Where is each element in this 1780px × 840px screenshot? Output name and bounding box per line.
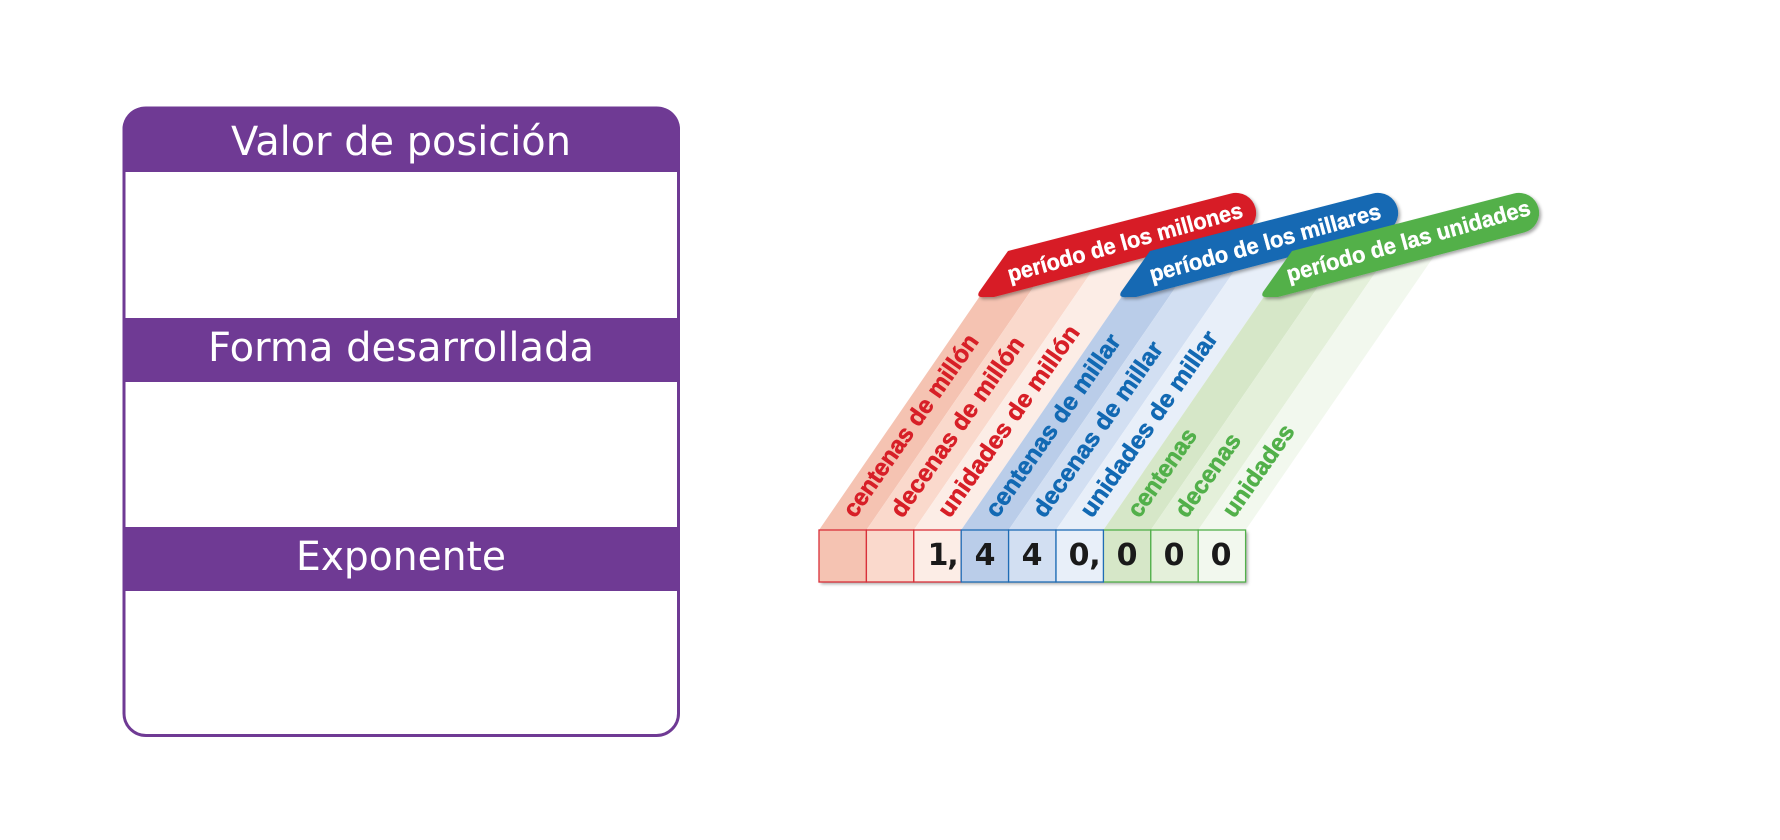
digits: 1,440,000: 0 (1211, 538, 1231, 573)
digits: 1,440,000: 1 (928, 538, 948, 573)
column labels: centenas (1122, 423, 1203, 522)
bands: millions columns (819, 245, 1157, 530)
header: Forma desarrollada (122, 318, 680, 382)
column labels (838, 320, 1300, 522)
digits: 1,440,000 (928, 538, 1231, 573)
digits: 1,440,000: 0 (1164, 538, 1184, 573)
column labels: decenas (1170, 428, 1247, 522)
column labels: unidades de millón (933, 320, 1085, 522)
header: Exponente: Exponente (296, 534, 506, 580)
digits: 1,440,000: 4 (975, 538, 995, 573)
period ribbon: unidades: período de las unidades (1284, 195, 1533, 287)
column labels: centenas de millón (838, 329, 984, 522)
column labels: decenas de millón (885, 332, 1030, 522)
column labels: decenas de millar (1027, 337, 1169, 522)
panel: place value worksheet (122, 107, 680, 736)
period ribbon: millones: período de los millones (1005, 198, 1245, 287)
digits: 1,440,000: 0 (1069, 538, 1089, 573)
column labels: centenas de millar (980, 329, 1127, 522)
header: Valor de posición: Valor de posición (231, 119, 571, 165)
bands: thousands columns (961, 245, 1300, 530)
digits: 1,440,000: 0 (1117, 538, 1137, 573)
chart: place value chart (819, 193, 1539, 582)
bands: units columns (1103, 245, 1442, 530)
column labels: unidades (1217, 419, 1300, 522)
column labels: unidades de millar (1075, 326, 1224, 522)
digit cells (819, 530, 1246, 582)
header: Forma desarrollada: Forma desarrollada (208, 325, 594, 371)
digits: 1,440,000: 4 (1022, 538, 1042, 573)
header: Valor de posición (122, 107, 680, 172)
digits: 1,440,000: , (947, 538, 959, 573)
period ribbon: millares: período de los millares (1147, 199, 1384, 287)
digits: 1,440,000: , (1089, 538, 1101, 573)
header: Exponente (122, 527, 680, 591)
